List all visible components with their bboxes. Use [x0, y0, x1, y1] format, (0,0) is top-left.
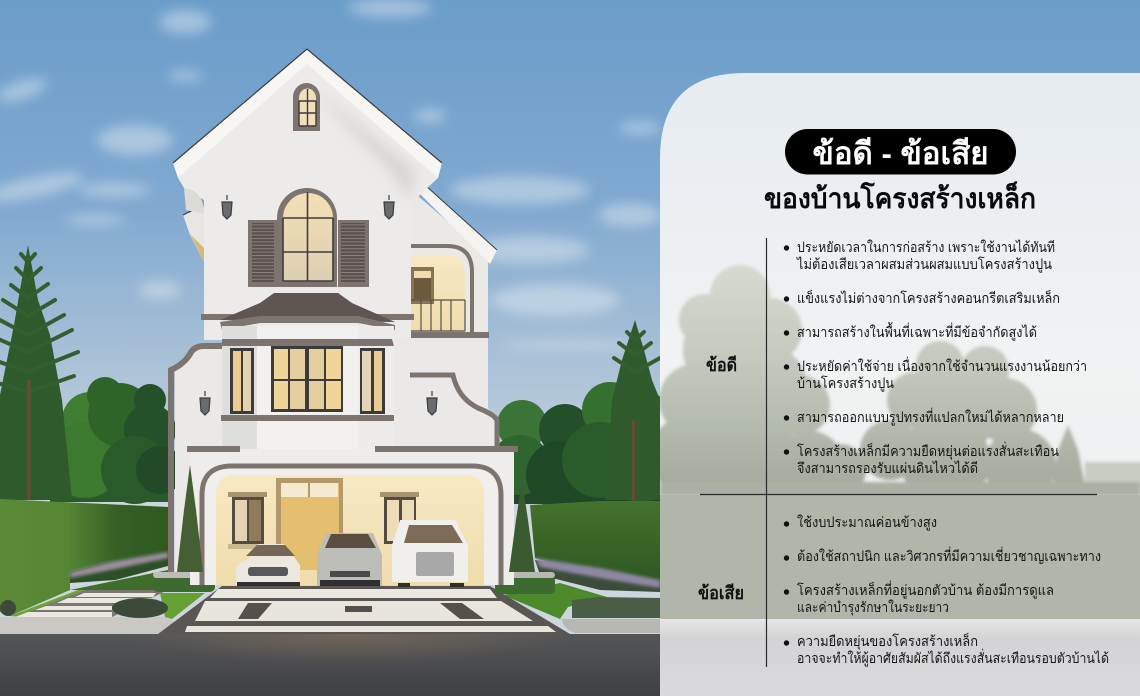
pro 1: ไม่ต้องเสียเวลาผสมส่วนผสมแบบโครงสร้างปูน	[796, 256, 1052, 273]
panel: hedge band	[660, 495, 1140, 619]
garage windows and front door	[228, 478, 419, 570]
pro 1	[784, 239, 1055, 273]
road, curb and lawns	[0, 570, 660, 696]
pro 3: สามารถสร้างในพื้นที่เฉพาะที่มีข้อจำกัดสูงได้	[797, 322, 1037, 341]
cars	[236, 520, 468, 587]
eave pocket shadow	[184, 188, 204, 214]
pros list	[784, 239, 1087, 476]
garage opening	[202, 466, 501, 585]
con 1: ใช้งบประมาณค่อนข้างสูง	[797, 514, 937, 531]
cons list	[784, 514, 1109, 667]
con 4	[784, 632, 1109, 667]
driveway	[158, 586, 570, 634]
third floor bay roof	[201, 293, 414, 330]
section label: cons: ข้อเสีย	[698, 583, 744, 603]
pro 4: บ้านโครงสร้างปูน	[797, 375, 894, 392]
con 4: ความยืดหยุ่นของโครงสร้างเหล็ก	[797, 632, 978, 650]
ground floor facade	[187, 446, 518, 585]
section label: pros: ข้อดี	[706, 355, 737, 375]
pro 5: สามารถออกแบบรูปทรงที่แปลกใหม่ได้หลากหลาย	[797, 408, 1064, 426]
subtitle: ของบ้านโครงสร้างเหล็ก	[764, 181, 1036, 214]
panel: tree silhouettes	[650, 265, 1140, 505]
pro 6	[784, 442, 1059, 476]
pro 6: โครงสร้างเหล็กมีความยืดหยุ่นต่อแรงสั่นสะเทือน	[797, 442, 1059, 460]
gable shadow	[315, 90, 415, 200]
pro 2: แข็งแรงไม่ต่างจากโครงสร้างคอนกรีตเสริมเหล็ก	[797, 289, 1060, 306]
cypress trees	[177, 465, 535, 572]
right wing with gable roof	[404, 185, 497, 338]
left background trees	[0, 245, 184, 504]
house	[171, 49, 535, 587]
main walls	[178, 60, 438, 340]
balcony	[411, 246, 489, 338]
main arched window with shutters	[248, 188, 369, 287]
right background trees	[490, 320, 673, 509]
con 2: ต้องใช้สถาปนิก และวิศวกรที่มีความเชี่ยวชาญเฉพาะทาง	[797, 547, 1101, 564]
pro 4	[784, 357, 1087, 392]
pro 6: จึงสามารถรองรับแผ่นดินไหวได้ดี	[797, 460, 978, 476]
panel: road band	[660, 619, 1140, 696]
hedges	[0, 499, 660, 616]
heading pill: ข้อดี - ข้อเสีย	[812, 136, 988, 171]
bushes and flower beds	[0, 552, 660, 618]
second floor walls	[171, 326, 497, 572]
pro 4: ประหยัดค่าใช้จ่าย เนื่องจากใช้จำนวนแรงงานน้อยกว่า	[797, 357, 1087, 374]
lower left eave	[183, 207, 204, 262]
bay windows	[221, 339, 394, 421]
attic window	[293, 83, 320, 131]
con 3: โครงสร้างเหล็กที่อยู่นอกตัวบ้าน ต้องมีการดูแล	[797, 581, 1054, 599]
heading pill	[785, 129, 1016, 174]
pro 1: ประหยัดเวลาในการก่อสร้าง เพราะใช้งานได้ทันที	[797, 239, 1055, 255]
con 3	[784, 581, 1054, 616]
table divider lines	[700, 238, 1097, 667]
upper wall lamps	[222, 195, 394, 219]
con 3: และค่าบำรุงรักษาในระยะยาว	[797, 599, 949, 616]
lower wall lamps	[200, 391, 437, 415]
translucent information panel	[650, 73, 1140, 696]
main roof	[173, 49, 442, 178]
